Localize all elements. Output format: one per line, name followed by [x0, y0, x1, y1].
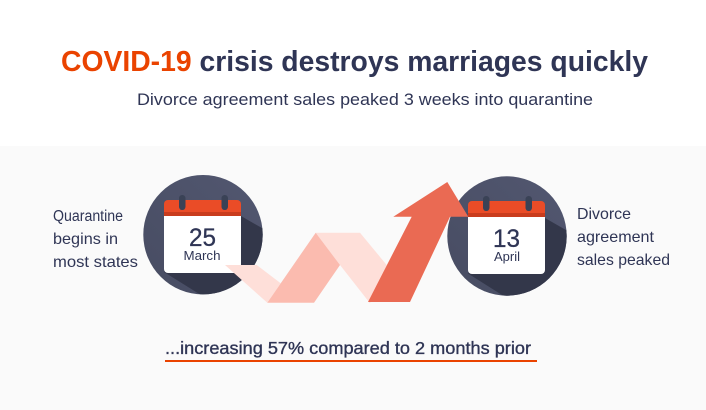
- icon: calendar 25 March: [143, 175, 263, 294]
- icon: calendar 13 April: [447, 176, 567, 296]
- text: divorce agreement sales peaked: agreement: [577, 229, 655, 246]
- panel: main background: [0, 146, 706, 410]
- text: divorce agreement sales peaked: Divorce: [577, 206, 631, 223]
- callout: increase: ...increasing 57% compared to 2 months prior: [165, 338, 531, 358]
- text: quarantine begins: Quarantine: [53, 208, 123, 225]
- icon: calendar 13 April: April: [494, 249, 520, 264]
- icon: calendar 25 March: March: [184, 248, 220, 263]
- title: COVID-19 crisis destroys marriages quickly: [61, 46, 648, 78]
- panel: header background: [0, 0, 706, 146]
- text: quarantine begins: begins in: [53, 231, 118, 248]
- text: divorce agreement sales peaked: sales peaked: [577, 252, 670, 269]
- arrow: rising zigzag: [225, 182, 468, 303]
- text: quarantine begins: [53, 208, 138, 271]
- icon: calendar 13 April: 13: [493, 225, 520, 253]
- text: quarantine begins: most states: [53, 254, 138, 271]
- subtitle: Divorce agreement sales peaked 3 weeks into quarantine: [137, 90, 593, 109]
- text: divorce agreement sales peaked: [577, 206, 670, 269]
- icon: calendar 25 March: 25: [189, 224, 216, 252]
